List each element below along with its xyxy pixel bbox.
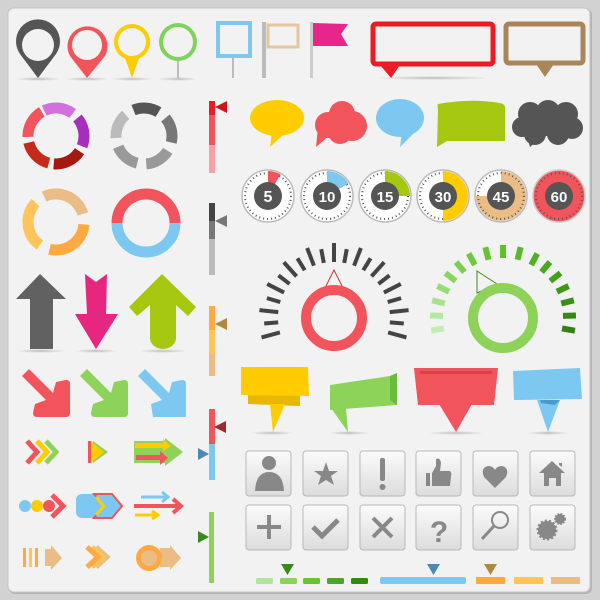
big arrows	[16, 274, 196, 353]
speech bubbles	[250, 99, 583, 147]
small arrows row 1	[27, 438, 183, 466]
icon: exclamation	[380, 458, 386, 490]
timers: 60	[551, 189, 567, 206]
cycle arrows red blue	[117, 194, 175, 252]
timers: 5	[264, 189, 273, 206]
icon: plus	[257, 515, 281, 539]
icon: home	[539, 461, 565, 486]
buttons	[246, 451, 575, 550]
icon: magnifier	[482, 512, 508, 539]
gauge green	[430, 245, 576, 348]
timers: 15	[377, 189, 393, 206]
cycle arrows orange	[17, 183, 95, 261]
callout boxes	[373, 24, 583, 80]
origami banners	[241, 367, 582, 435]
diagonal arrows	[22, 369, 186, 417]
segmented ring gray	[105, 97, 183, 175]
icon: user	[255, 456, 284, 491]
gauge red	[259, 243, 409, 346]
timers: 45	[493, 189, 509, 206]
segmented ring colorful	[17, 97, 95, 175]
icon: gears	[538, 514, 565, 539]
icon: heart	[483, 466, 507, 488]
icon: check	[313, 520, 338, 536]
icon: star	[314, 462, 338, 485]
icon: question: ?	[430, 516, 448, 549]
small arrows row 2	[19, 492, 181, 519]
timers	[242, 170, 585, 222]
timers: 10	[319, 189, 335, 206]
map pins	[16, 19, 198, 81]
sign boards and flag	[218, 22, 348, 78]
flag sticks	[198, 101, 227, 583]
timers: 30	[435, 189, 451, 206]
progress bars	[256, 564, 580, 584]
icon: cross	[373, 518, 392, 537]
small arrows row 3	[23, 545, 181, 571]
icon: thumbs up	[426, 458, 451, 486]
